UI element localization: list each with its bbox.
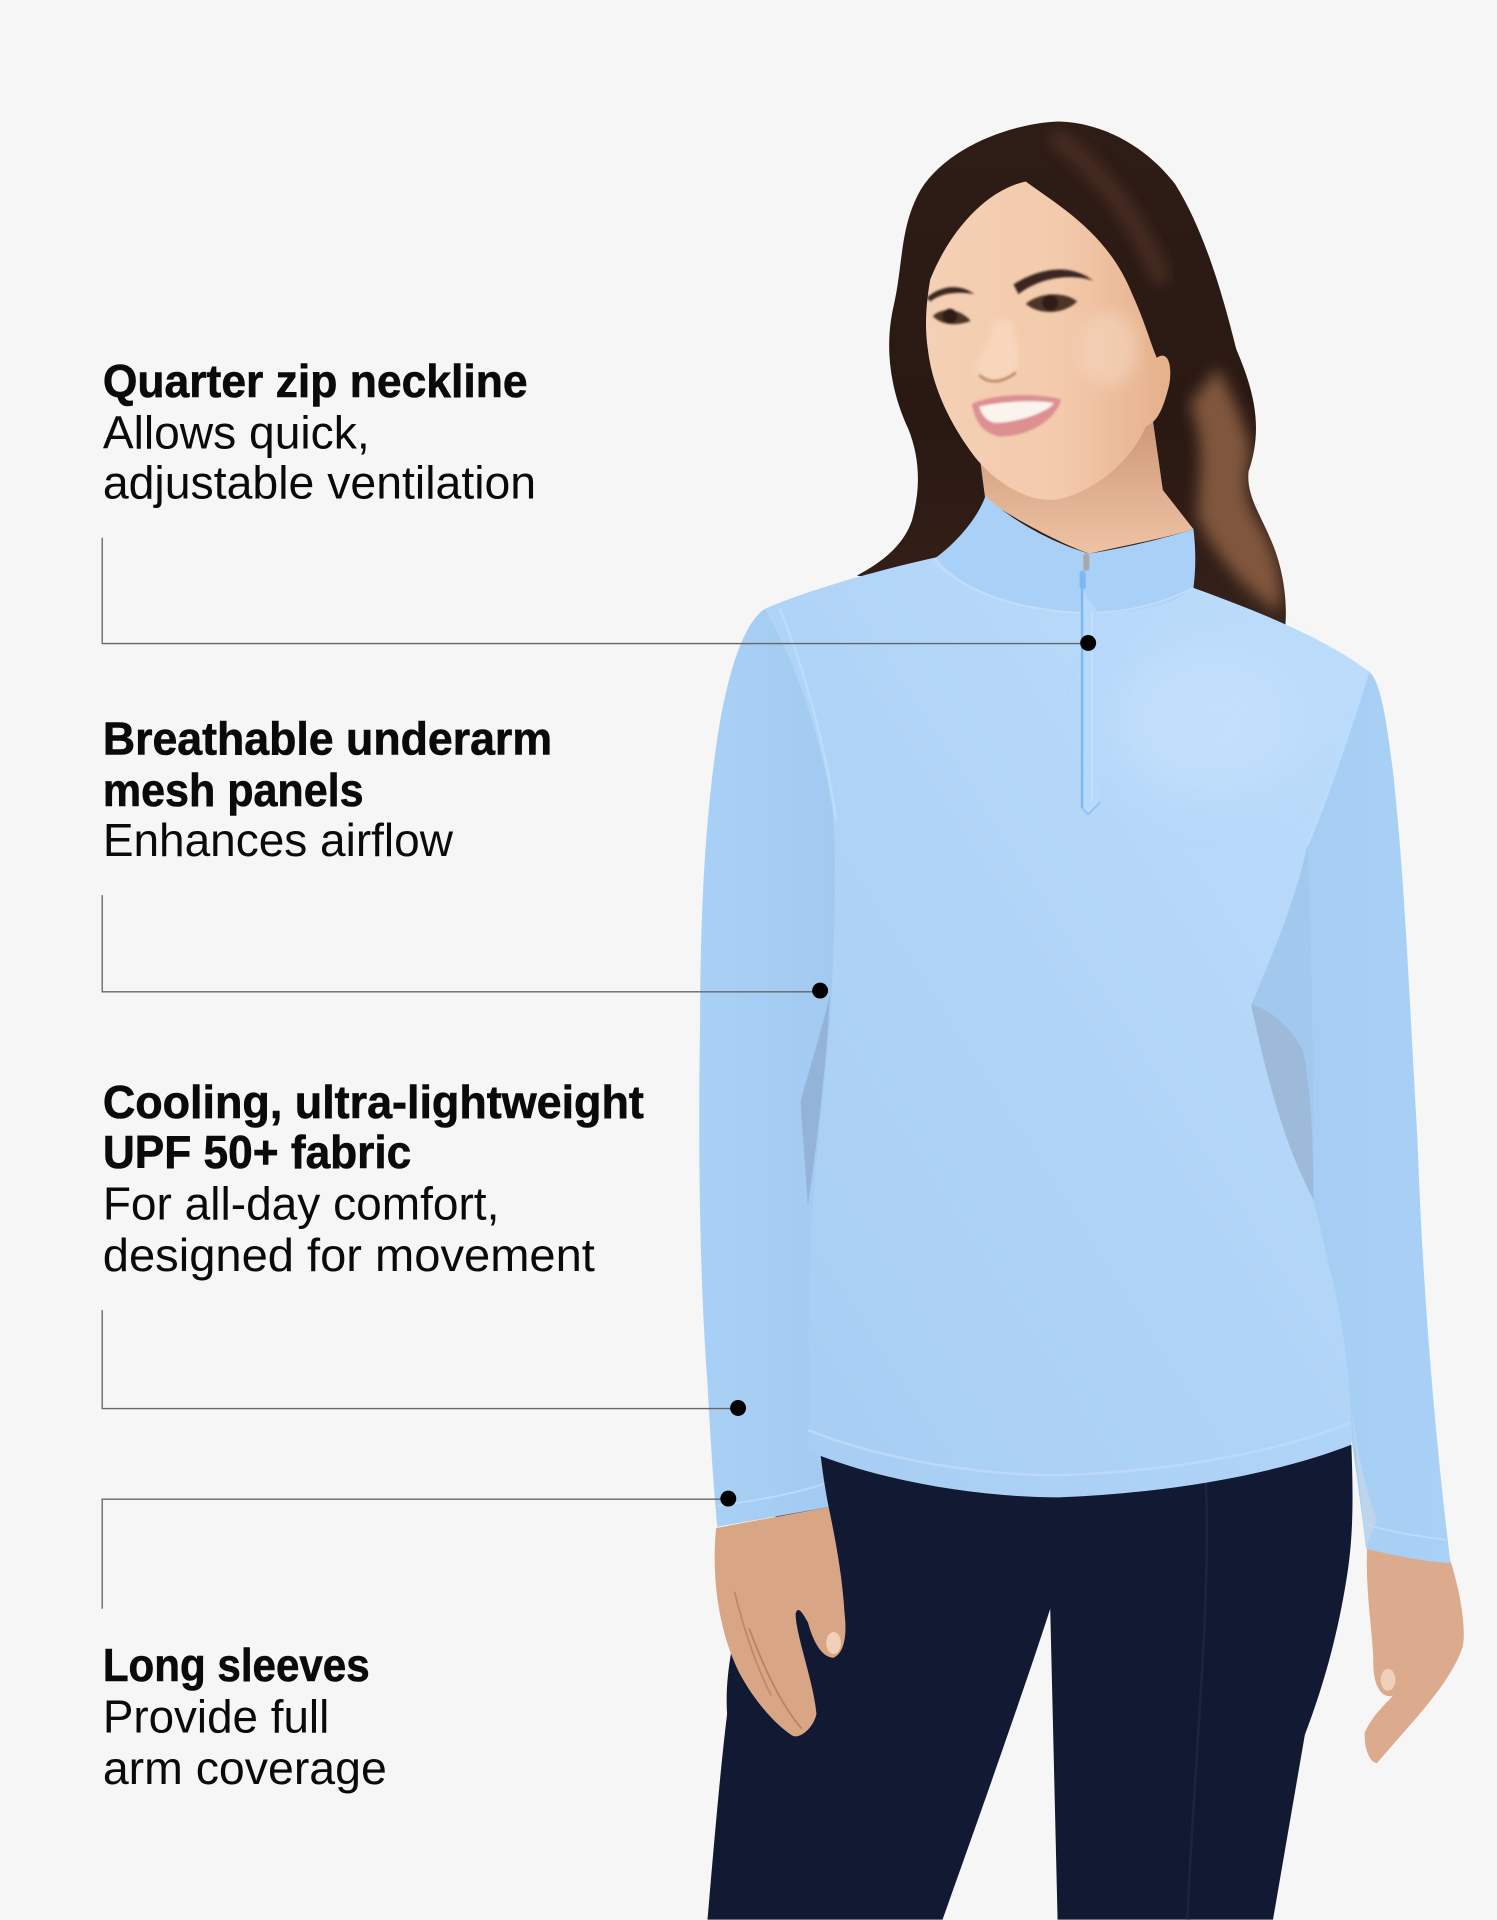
text block: breathable underarm mesh panels	[103, 712, 552, 866]
torso	[765, 557, 1368, 1497]
text block: breathable underarm mesh panels: Breathable underarm	[103, 712, 552, 764]
right hand	[1365, 1545, 1464, 1763]
text block: long sleeves: Provide full	[103, 1690, 329, 1742]
chest highlight	[1114, 649, 1297, 796]
text block: cooling fabric: For all-day comfort,	[103, 1177, 499, 1229]
text block: quarter zip neckline: Allows quick,	[103, 406, 370, 458]
text block: long sleeves: arm coverage	[103, 1742, 387, 1794]
callout leader: long sleeves	[102, 1491, 736, 1609]
text block: cooling fabric: UPF 50+ fabric	[103, 1126, 411, 1178]
zipper	[1080, 554, 1100, 816]
text block: breathable underarm mesh panels: mesh panels	[103, 764, 364, 816]
text block: cooling fabric	[103, 1076, 644, 1281]
face	[926, 182, 1170, 500]
pants	[707, 1445, 1353, 1920]
neck	[979, 404, 1193, 554]
cuff seams	[717, 1484, 1447, 1540]
callout leader: underarm mesh panels	[102, 895, 828, 999]
text block: quarter zip neckline: adjustable ventilation	[103, 457, 536, 509]
shirt	[699, 496, 1450, 1563]
text block: breathable underarm mesh panels: Enhances airflow	[103, 814, 453, 866]
hem seam	[808, 1423, 1350, 1475]
right sleeve	[1251, 671, 1450, 1563]
mesh underarm panel right	[1251, 845, 1313, 1200]
model photo: woman in blue quarter zip	[699, 122, 1464, 1920]
text block: quarter zip neckline: Quarter zip neckline	[103, 355, 528, 407]
left sleeve	[699, 609, 843, 1527]
collar	[936, 496, 1195, 613]
mesh underarm panel left	[801, 994, 830, 1206]
text block: long sleeves	[103, 1639, 387, 1794]
text block: quarter zip neckline	[103, 355, 536, 509]
text block: long sleeves: Long sleeves	[103, 1639, 370, 1691]
sleeve seam	[780, 609, 1368, 845]
text block: cooling fabric: designed for movement	[103, 1229, 595, 1281]
callout leader: quarter zip neckline	[102, 538, 1096, 651]
hair	[857, 122, 1286, 627]
left hand	[715, 1507, 845, 1736]
callout leader: UPF fabric	[102, 1310, 746, 1416]
text block: cooling fabric: Cooling, ultra-lightweight	[103, 1076, 644, 1128]
facial features	[927, 269, 1138, 436]
